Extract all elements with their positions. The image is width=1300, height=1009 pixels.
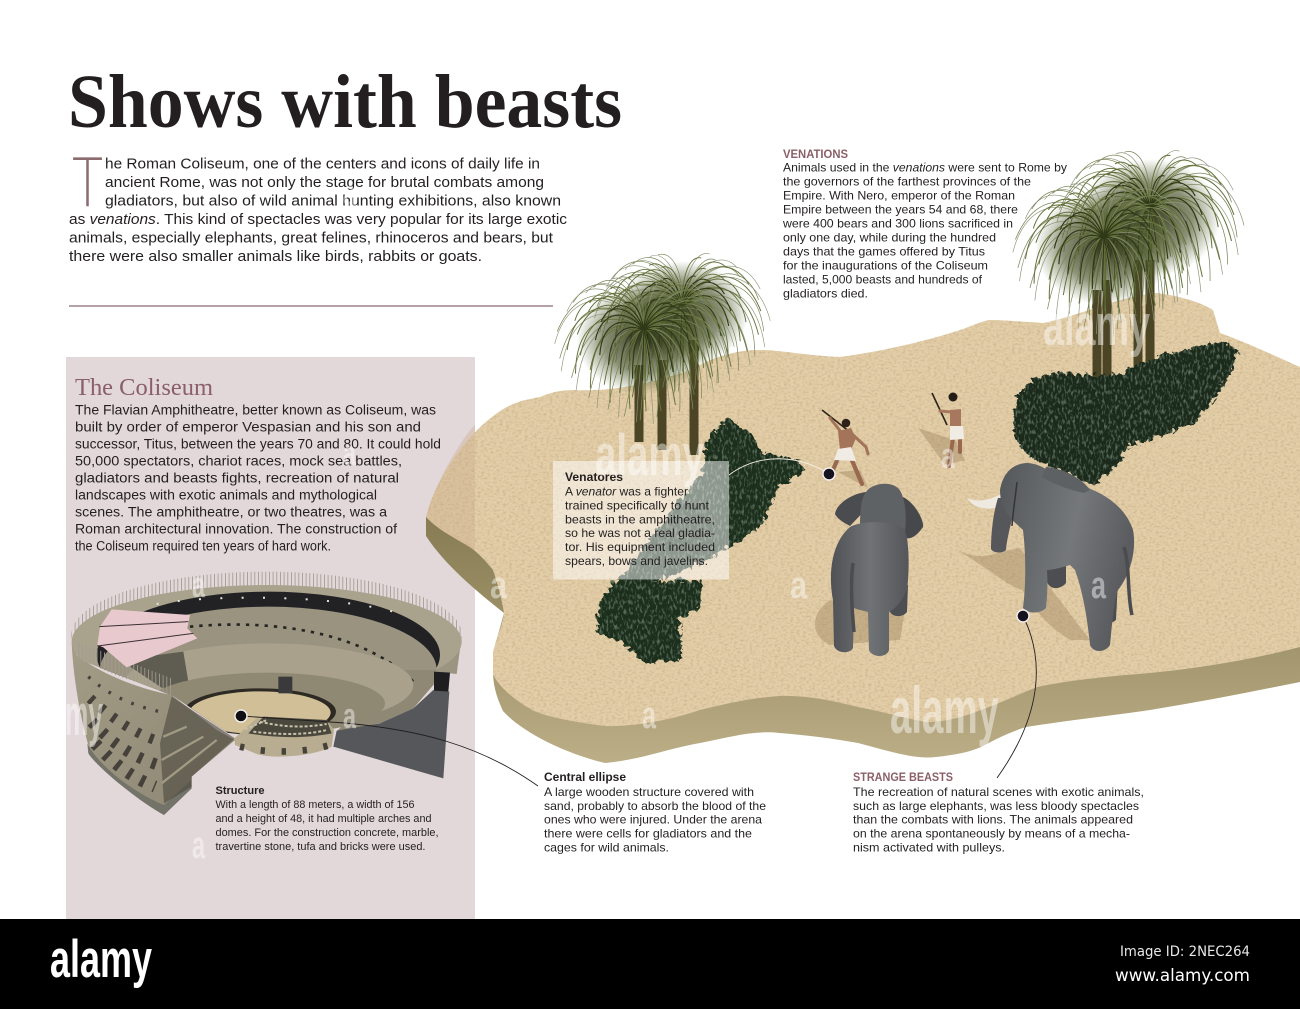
arena floor [189,691,331,734]
loincloth [834,447,856,461]
tusk [967,493,1005,509]
cut plane [333,690,449,778]
venations text: Empire between the years 54 and 68, there [783,204,1018,216]
intro paragraph: he Roman Coliseum, one of the centers and icons of daily life in [105,156,540,172]
venations text [782,148,1067,300]
central ellipse text: cages for wild animals. [544,842,669,854]
far legs [1047,555,1066,588]
trunk [991,498,1016,553]
seat ring dark studs [190,625,415,683]
hunter with spear, right [932,392,964,466]
footer bar [0,919,1300,1009]
terrain side wall [426,517,1300,763]
stepped section [160,697,235,803]
watermarks: a [192,564,206,605]
venatores text: trained specifically to hunt [565,500,710,512]
image id: Image ID: 2NEC264 [1120,944,1250,960]
watermarks: a [490,565,508,607]
legs [949,438,960,466]
structure text: With a length of 88 meters, a width of 156 [216,799,415,811]
strange beasts text: STRANGE BEASTS [853,771,953,784]
hunter with spear, left [822,410,868,484]
wall base [87,743,192,815]
watermarks: a [343,432,357,473]
tail [851,563,854,632]
head [842,419,850,427]
watermarks [65,172,1150,867]
title: Shows with beasts [68,60,622,144]
elephant rear view [831,484,923,656]
rim [72,585,462,679]
lower seating ring [148,673,385,734]
central ellipse text [544,771,766,854]
venations text: gladiators died. [783,288,868,300]
head [948,392,958,402]
structure text [216,785,438,853]
left lobe tint [426,425,475,551]
strange beasts marker [1017,610,1029,622]
panel: The Coliseum [66,357,475,919]
venations text: Empire. With Nero, emperor of the Roman [783,190,1015,202]
coliseum heading and text: gladiators and beasts fights, recreation of natural [75,470,399,486]
venations text: lasted, 5,000 beasts and hundreds of [783,274,983,286]
intro paragraph: ancient Rome, was not only the stage for brutal combats among [105,175,544,191]
right end of outer wall [434,637,462,674]
coliseum heading and text: scenes. The amphitheatre, or two theatres, was a [75,504,388,520]
venations text: only one day, while during the hundred [783,232,996,244]
coliseum heading and text: successor, Titus, between the years 70 and 80. It could hold [75,436,441,452]
venations text: were 400 bears and 300 lions sacrificed in [782,218,1013,230]
venatores text: tor. His equipment included [565,541,715,554]
watermarks: a [1091,565,1107,607]
front railing posts [77,642,172,696]
trunks [1097,260,1150,392]
venatores text: spears, bows and javelins. [565,555,708,568]
venatores text: beasts in the amphitheatre, [565,514,715,526]
structure text: travertine stone, tufa and bricks were used. [216,841,426,853]
strange beasts text: on the arena spontaneously by means of a mecha- [853,828,1130,840]
coliseum heading and text: 50,000 spectators, chariot races, mock sea battles, [75,454,402,468]
cut floor section [234,718,334,757]
shadows on the sand [815,428,1090,645]
fronds [1048,141,1247,316]
ears [835,492,870,526]
sand surface [426,293,1300,726]
legs [833,458,862,484]
strange beasts text: such as large elephants, was less bloody spectacles [853,800,1139,813]
coliseum cutaway [71,572,462,815]
coliseum heading and text: the Coliseum required ten years of hard work. [75,538,331,554]
intro paragraph: gladiators, but also of wild animal hunting exhibitions, also known [105,194,561,210]
coliseum heading and text: The Coliseum [75,375,213,401]
venatores text [565,471,715,568]
watermarks: alamy [1043,293,1150,358]
palm trees left [546,245,773,455]
structure text: domes. For the construction concrete, marble, [216,827,438,839]
watermarks: a [941,435,956,476]
venations text: VENATIONS [783,148,848,161]
watermarks: a [642,695,657,737]
imperial box [278,677,292,693]
central ellipse text: sand, probably to absorb the blood of the [544,800,766,813]
head [860,484,906,530]
central ellipse text: ones who were injured. Under the arena [544,814,763,826]
watermarks: alamy [890,673,999,747]
watermarks: a [343,695,357,736]
outer wall [72,642,235,815]
venations text: for the inaugurations of the Coliseum [783,260,988,272]
palm trees right [1004,141,1247,392]
intro paragraph: animals, especially elephants, great felines, rhinoceros and bears, but [69,230,553,246]
strange beasts text: nism activated with pulleys. [853,842,1005,854]
arch rows [88,677,160,787]
interior seating [72,585,462,735]
torso [950,409,961,428]
venatores text box [553,461,729,580]
structure text: Structure [216,785,265,797]
venatores marker [823,468,835,480]
intro paragraph: there were also smaller animals like birds, rabbits or goats. [69,249,482,265]
central ellipse text: A large wooden structure covered with [544,786,754,799]
intro paragraph [69,144,567,265]
loincloth [950,426,964,440]
venations text: the governors of the farthest provinces of the [783,176,1031,188]
venatores text: Venatores [565,471,623,484]
ear [1042,467,1090,493]
watermarks: a [343,172,357,213]
coliseum leader line [241,716,538,786]
gallery lights [157,598,393,612]
central ellipse text: Central ellipse [544,771,627,784]
body and near legs [1000,463,1134,651]
far back leg [888,585,908,616]
venatores text: A venator was a fighter [565,486,688,498]
coliseum heading and text: landscapes with exotic animals and mythological [75,488,377,502]
railing posts [71,572,462,698]
strange beasts text [853,771,1144,854]
body and front legs [831,522,909,656]
intro paragraph: as venations . This kind of spectacles was very popular for its large exotic [69,212,567,228]
upper tier [100,607,437,733]
arena terrain block [426,293,1300,763]
coliseum heading and text: The Flavian Amphitheatre, better known as Coliseum, was [75,402,436,418]
trunk crease [1012,482,1017,526]
bush left [594,414,801,660]
shaded left section [130,652,188,688]
strange beasts text: than the combats with lions. The animals appeared [853,814,1133,826]
footer logo: alamy [50,930,152,989]
elephant side view [967,463,1134,651]
cells front arches [240,745,330,751]
structure text: and a height of 48, it had multiple arches and [216,813,432,825]
mid tier [126,644,414,711]
coliseum heading and text: Roman architectural innovation. The construction of [75,522,397,536]
venations text: days that the games offered by Titus [783,246,985,258]
underground cells [248,717,332,737]
venatores leader line [729,459,829,475]
tail [1124,547,1132,615]
coliseum marker [235,710,247,722]
bush right [1010,338,1236,482]
fronds [586,245,773,402]
venatores text: so he was not a real gladia- [565,527,715,540]
coliseum heading and text: built by order of emperor Vespasian and his son and [75,420,421,434]
central ellipse text: there were cells for gladiators and the [544,828,752,840]
coliseum heading and text [75,375,441,554]
strange beasts leader line [997,616,1036,778]
trunks [639,340,694,455]
torso [838,428,856,450]
watermarks: a [192,825,206,867]
watermarks: a [790,565,808,607]
watermarks: alamy [595,423,704,488]
website: www.alamy.com [1115,966,1250,986]
dark gallery [97,592,440,718]
strange beasts text: The recreation of natural scenes with exotic animals, [853,786,1144,799]
venations text: Animals used in the venations were sent to Rome by [783,162,1067,174]
drop cap: T [72,144,103,222]
awning [97,609,197,667]
watermarks: my [65,683,103,748]
